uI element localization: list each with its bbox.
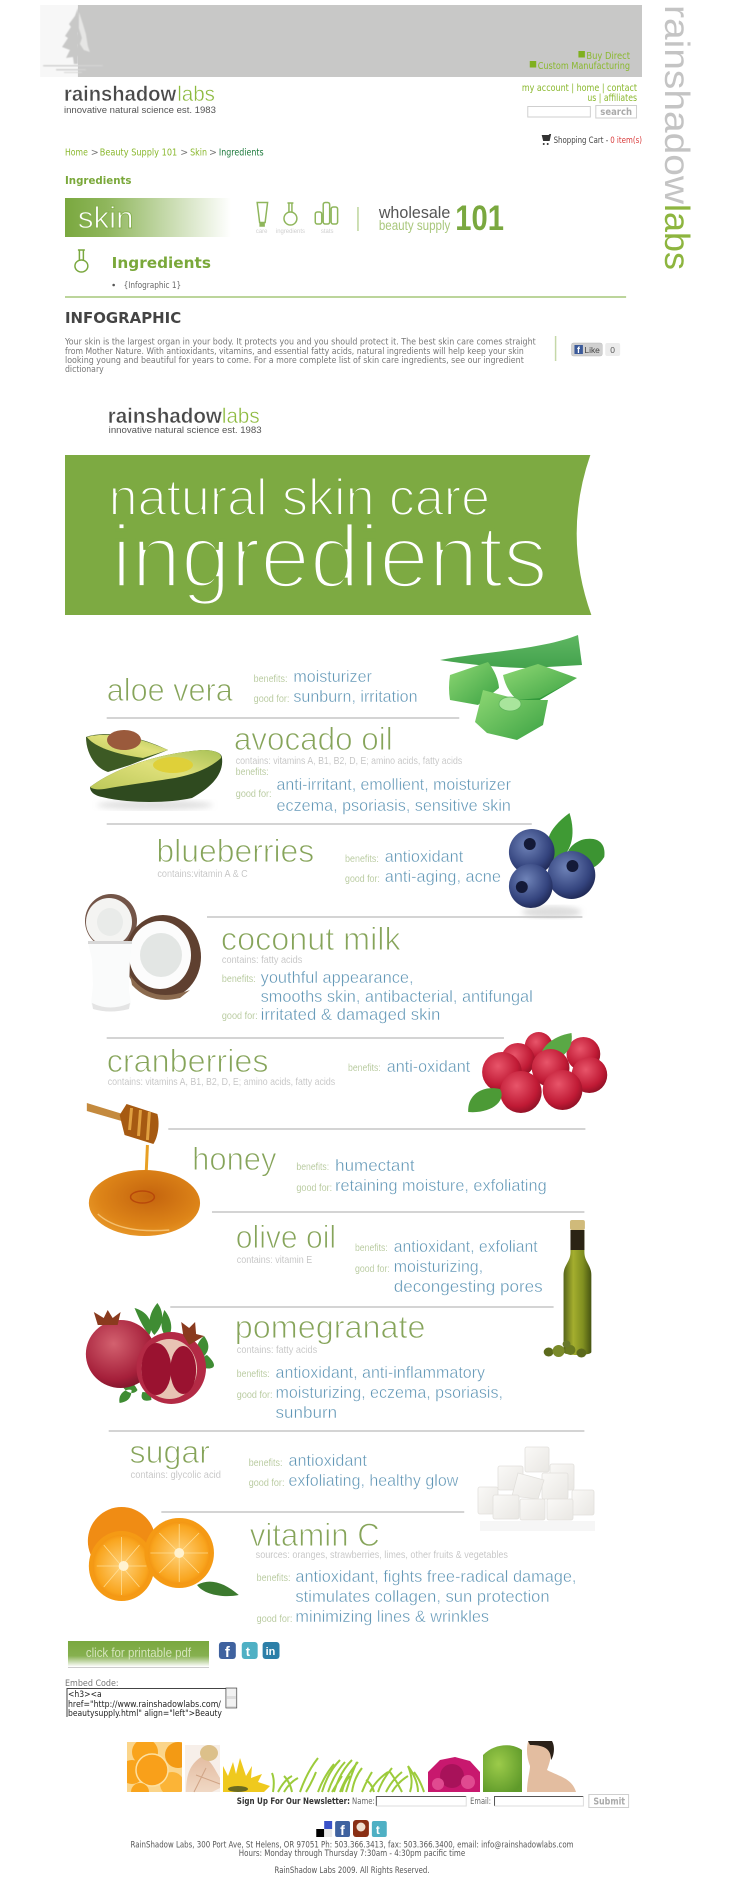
ingredient: honey (87, 1103, 584, 1236)
ingredient: cranberries: anti-oxidant (387, 1057, 470, 1076)
ingredient: vitamin C: stimulates collagen, sun protection (295, 1587, 550, 1606)
ingredient: sugar: good for: (249, 1478, 284, 1489)
ingredient: honey: good for: (296, 1183, 332, 1194)
footer address: RainShadow Labs 2009. All Rights Reserved. (275, 1865, 429, 1875)
ingredient: cranberries: benefits: (348, 1063, 381, 1074)
ingredient: coconut milk: good for: (222, 1011, 258, 1022)
icon: cart (542, 134, 551, 145)
ingredient: olive oil (170, 1219, 591, 1358)
ingredient: avocado oil (86, 721, 532, 824)
ingredient: coconut milk: coconut milk (221, 921, 401, 957)
page heading: Ingredients (65, 174, 132, 187)
ingredient: blueberries: antioxidant (385, 847, 464, 866)
ingredients section heading (75, 250, 211, 272)
icon labels: stats (321, 229, 333, 235)
face tile (527, 1741, 576, 1792)
icon: blueberries (509, 813, 605, 918)
breadcrumb: Home (65, 147, 88, 159)
shopping cart: 0 item(s) (610, 135, 642, 145)
title line 1: natural skin care (109, 468, 490, 526)
breadcrumb: Skin (190, 147, 207, 159)
ingredient: avocado oil: eczema, psoriasis, sensitive skin (277, 796, 511, 815)
infographic logo (108, 405, 262, 435)
ingredient: sugar: antioxidant (288, 1451, 367, 1470)
ingredient: avocado oil: avocado oil (234, 721, 393, 757)
icon: honey dipper and pool (87, 1103, 200, 1236)
site logo: innovative natural science est. 1983 (64, 105, 216, 115)
icon labels: ingredients (276, 229, 305, 235)
ingredient list: {Infographic 1} (124, 281, 181, 291)
footer image strip (127, 1741, 576, 1792)
ingredient: blueberries: blueberries (156, 833, 314, 869)
ingredient: coconut milk: smooths skin, antibacterial, antifungal (261, 987, 533, 1006)
pink flower tile (428, 1757, 480, 1792)
icon: sugar cubes (478, 1447, 595, 1531)
ingredient: pomegranate (86, 1303, 584, 1431)
ingredient: sugar: contains: glycolic acid (131, 1470, 221, 1481)
ingredient: blueberries: contains:vitamin A & C (157, 869, 248, 880)
title line 2: ingredients (112, 507, 548, 606)
icon: blog (353, 1820, 369, 1837)
ingredient: vitamin C: benefits: (257, 1573, 290, 1584)
newsletter signup: Sign Up For Our Newsletter: (237, 1796, 350, 1806)
ingredient: cranberries: contains: vitamins A, B1, B2, D, E; amino acids, fatty acids (108, 1077, 335, 1088)
shopping cart: Shopping Cart - (554, 135, 608, 145)
ingredient: aloe vera: aloe vera (107, 672, 233, 708)
breadcrumb: > (209, 147, 217, 159)
ingredient: aloe vera: good for: (254, 694, 289, 705)
search box: search (600, 107, 632, 118)
orange slices tile (127, 1742, 182, 1792)
icon: delicious (316, 1821, 332, 1837)
category icons (257, 202, 338, 226)
wholesale 101 logo: wholesale (378, 203, 450, 222)
newsletter signup: Email: (470, 1796, 491, 1806)
ingredient: olive oil: decongesting pores (394, 1277, 543, 1296)
breadcrumb (65, 147, 264, 159)
icon: flask (75, 250, 88, 272)
top navigation: us | affiliates (587, 93, 637, 104)
green apple tile (483, 1745, 522, 1792)
wholesale 101 logo: beauty supply (379, 217, 450, 233)
pdf button (68, 1641, 209, 1668)
site logo: labs (177, 83, 215, 106)
intro paragraph: dictionary (65, 364, 104, 374)
ingredient: sugar: sugar (130, 1434, 210, 1470)
ingredient: blueberries: good for: (345, 874, 380, 885)
ingredient: pomegranate: moisturizing, eczema, psoriasis, (276, 1383, 503, 1402)
infographic heading: INFOGRAPHIC (65, 309, 181, 327)
ingredient: aloe vera: sunburn, irritation (293, 687, 418, 706)
ingredient: olive oil: antioxidant, exfoliant (394, 1237, 538, 1256)
icon: cranberries (468, 1032, 607, 1113)
yellow flower tile (223, 1758, 270, 1792)
skin banner: skin (78, 200, 134, 235)
icon labels: care (256, 229, 268, 235)
ingredient: pomegranate: contains: fatty acids (237, 1345, 317, 1356)
header banner (40, 5, 642, 77)
icon: facebook: f (225, 1644, 230, 1661)
ingredient: avocado oil: good for: (236, 789, 272, 800)
embed code textarea: <h3><a (68, 1690, 102, 1700)
ingredient: blueberries: benefits: (345, 854, 379, 865)
ingredient: cranberries (107, 1032, 607, 1129)
ingredient: sugar: exfoliating, healthy glow (288, 1471, 459, 1490)
site logo: rainshadow (64, 83, 177, 106)
woman tile (185, 1745, 220, 1792)
icon: pine tree (43, 8, 103, 73)
ingredient: vitamin C: vitamin C (250, 1517, 380, 1553)
ingredient: vitamin C: sources: oranges, strawberries, limes, other fruits & vegetables (256, 1550, 508, 1561)
intro paragraph: from Mother Nature. With antioxidants, vitamins, and essential fatty acids, natural ingredients will help keep your skin (65, 346, 524, 356)
ingredient: pomegranate: benefits: (237, 1369, 270, 1380)
infographic logo: labs (222, 405, 260, 428)
site logo (64, 83, 216, 115)
icon: care tube (257, 202, 268, 226)
vertical side logo: rainshadow (657, 5, 696, 205)
facebook like button: f (577, 345, 580, 355)
wholesale 101 logo: 101 (455, 199, 504, 238)
pdf button: click for printable pdf (86, 1645, 191, 1660)
ingredient: coconut milk: benefits: (222, 974, 256, 985)
intro paragraph: Your skin is the largest organ in your body. It protects you and you should protect it. The best skin care comes straight (64, 336, 536, 347)
icon: linkedin: in (266, 1646, 276, 1658)
ingredient: vitamin C: antioxidant, fights free-radical damage, (295, 1567, 576, 1586)
breadcrumb: > (91, 147, 99, 159)
icon: stats bars (315, 202, 338, 224)
embed code textarea: beautysupply.html" align="left">Beauty (68, 1709, 223, 1719)
shopping cart (542, 134, 642, 145)
icon: facebook: f (340, 1822, 345, 1838)
ingredient: coconut milk (85, 894, 533, 1038)
breadcrumb: Ingredients (219, 147, 264, 159)
ingredient: avocado oil: anti-irritant, emollient, moisturizer (277, 775, 511, 794)
ingredient: vitamin C (88, 1507, 576, 1626)
intro paragraph: looking young and beautiful for years to come. For a more complete list of skin care ingredients, see our ingredient (65, 355, 524, 365)
buy direct link: Buy Direct (586, 51, 630, 62)
ingredient: honey: benefits: (296, 1162, 329, 1173)
facebook like button: 0 (610, 345, 615, 355)
top navigation: my account | home | contact (522, 83, 637, 94)
ingredient: coconut milk: irritated & damaged skin (261, 1005, 440, 1024)
wholesale 101 logo (378, 199, 504, 238)
ingredient: cranberries: cranberries (107, 1043, 269, 1079)
icon: avocado halves (86, 730, 222, 810)
vertical side logo: labs (657, 204, 696, 270)
share icons (219, 1642, 280, 1661)
footer social icons (316, 1820, 387, 1838)
ingredient: aloe vera: moisturizer (293, 667, 372, 686)
custom manufacturing link: Custom Manufacturing (538, 61, 630, 72)
newsletter signup: Submit (593, 1796, 626, 1808)
title banner (65, 455, 591, 615)
intro paragraph (64, 336, 536, 374)
ingredient: aloe vera: benefits: (254, 674, 287, 685)
ingredient: honey: honey (192, 1141, 277, 1177)
ingredient: avocado oil: contains: vitamins A, B1, B2, D, E; amino acids, fatty acids (236, 756, 462, 767)
ingredient: coconut milk: contains: fatty acids (222, 955, 302, 966)
breadcrumb: > (180, 147, 188, 159)
ingredient: vitamin C: good for: (257, 1614, 292, 1625)
ingredient: pomegranate: good for: (237, 1390, 273, 1401)
icon: ingredients flask (284, 203, 297, 225)
infographic logo: rainshadow (108, 405, 223, 428)
infographic logo: innovative natural science est. 1983 (109, 425, 262, 435)
ingredients section heading: Ingredients (112, 254, 211, 272)
top navigation (522, 83, 637, 104)
icon: aloe leaves (440, 635, 582, 740)
ingredient: pomegranate: pomegranate (235, 1309, 425, 1345)
embed code label: Embed Code: (65, 1679, 119, 1689)
ingredient: honey: retaining moisture, exfoliating (335, 1176, 547, 1195)
grass tile (272, 1758, 424, 1792)
footer address: Hours: Monday through Thursday 7:30am - 4:30pm pacific time (239, 1848, 465, 1858)
ingredient: pomegranate: sunburn (276, 1403, 337, 1422)
facebook like button: Like (584, 345, 600, 355)
ingredient: avocado oil: benefits: (236, 767, 269, 778)
embed code textarea: href="http://www.rainshadowlabs.com/ (68, 1700, 222, 1710)
icon: oranges (88, 1507, 239, 1601)
search box (528, 106, 637, 118)
ingredient: olive oil: olive oil (236, 1219, 336, 1255)
ingredient: honey: humectant (335, 1156, 415, 1175)
ingredient: olive oil: benefits: (355, 1243, 388, 1254)
icon: twitter: t (376, 1823, 380, 1837)
ingredient: blueberries: anti-aging, acne (385, 867, 501, 886)
ingredient: sugar (130, 1434, 595, 1531)
icon: pomegranate fruits (86, 1303, 214, 1404)
newsletter signup (237, 1794, 629, 1808)
breadcrumb: Beauty Supply 101 (100, 147, 177, 159)
ingredient: sugar: benefits: (249, 1458, 282, 1469)
ingredient: aloe vera (107, 635, 582, 740)
icon: olive oil bottle (544, 1220, 591, 1358)
embed code textarea (67, 1688, 237, 1719)
facebook like button (571, 343, 620, 356)
icon: coconut and milk (85, 894, 201, 1012)
ingredient: olive oil: moisturizing, (394, 1257, 483, 1276)
ingredient: pomegranate: antioxidant, anti-inflammatory (276, 1363, 486, 1382)
icon labels (256, 229, 333, 235)
ingredient: vitamin C: minimizing lines & wrinkles (295, 1607, 489, 1626)
footer address (131, 1839, 573, 1875)
ingredient: blueberries (156, 813, 605, 918)
ingredient: coconut milk: youthful appearance, (261, 968, 414, 987)
footer address: RainShadow Labs, 300 Port Ave, St Helens, OR 97051 Ph: 503.366.3413, fax: 503.366.3400, email: info@rainshadowlabs.com (131, 1839, 573, 1850)
icon: twitter: t (246, 1644, 251, 1659)
vertical side logo (657, 5, 696, 270)
newsletter signup: Name: (352, 1796, 375, 1806)
ingredient: olive oil: contains: vitamin E (237, 1255, 313, 1266)
ingredient: olive oil: good for: (355, 1264, 390, 1275)
skin banner (65, 198, 231, 237)
